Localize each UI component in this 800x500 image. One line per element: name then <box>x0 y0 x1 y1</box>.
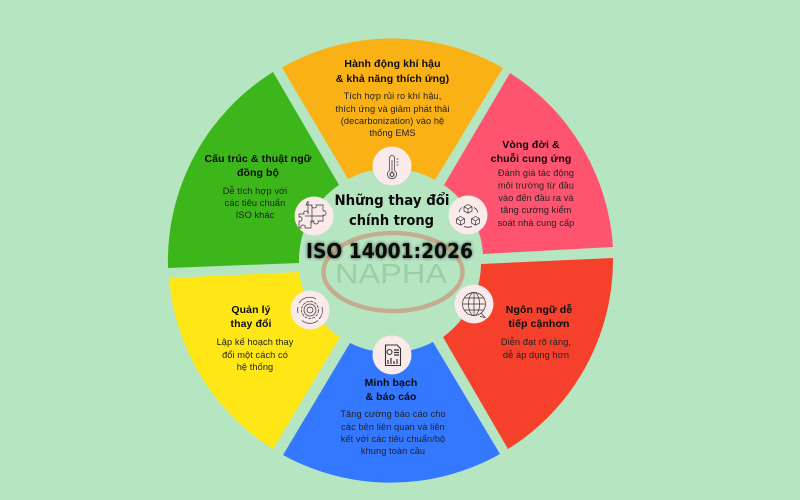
panel: accessible language <box>443 258 613 449</box>
panel: climate action <box>282 38 503 180</box>
text: life cycle: Đánh giá tác động <box>498 168 574 178</box>
text: life cycle: môi trường từ đầu <box>498 180 574 190</box>
panel: structure and terminology <box>168 72 339 268</box>
text: transparency: kết với các tiêu chuẩn/bộ <box>341 434 445 444</box>
icon: report document <box>372 336 412 374</box>
text: climate action: (decarbonization) vào hệ <box>341 116 444 126</box>
text: structure and terminology: ISO khác <box>236 210 275 220</box>
logo: faint watermark <box>324 233 462 311</box>
text: accessible language: Diễn đạt rõ ràng, <box>501 337 571 347</box>
text: change management: đổi một cách có <box>222 350 288 360</box>
text: structure and terminology: các tiêu chuẩn <box>225 198 285 208</box>
center title: Những thay đổi <box>334 192 450 209</box>
heading: accessible language: Ngôn ngữ dễ <box>506 303 572 316</box>
heading: life cycle: Vòng đời & <box>502 139 560 151</box>
heading: climate action: Hành động khí hậu <box>344 58 441 70</box>
text: accessible language: dễ áp dụng hơn <box>503 350 569 360</box>
heading: structure and terminology: Cấu trúc & thuật ngữ <box>204 153 312 165</box>
heading: transparency: & báo cáo <box>365 391 417 403</box>
logo: faint watermark: NAPHA <box>335 258 447 289</box>
text: life cycle: vào đến đầu ra và <box>498 193 574 203</box>
icon: puzzle pieces <box>294 196 334 236</box>
heading: climate action: & khả năng thích ứng) <box>336 73 449 85</box>
text: change management: hệ thống <box>237 362 273 372</box>
center title: ISO 14001:2026 <box>306 239 473 263</box>
text: life cycle: tăng cường kiểm <box>501 205 572 215</box>
heading: life cycle: chuỗi cung ứng <box>491 152 571 165</box>
icon: thermometer <box>372 146 412 186</box>
icon: cubes cycle <box>448 196 488 234</box>
text: climate action: thích ứng và giảm phát thải <box>335 104 450 114</box>
panel: change management <box>169 272 340 449</box>
text: transparency: khung toàn cầu <box>361 446 425 456</box>
icon: globe speech bubble <box>454 284 494 324</box>
panel: life cycle <box>444 73 613 254</box>
center title <box>306 192 473 263</box>
text: life cycle: soát nhà cung cấp <box>498 218 574 228</box>
icon: change flower <box>290 290 330 330</box>
text: transparency: các bên liên quan và liên <box>341 422 445 432</box>
heading: transparency: Minh bạch <box>365 377 417 389</box>
heading: structure and terminology: đồng bộ <box>237 167 279 179</box>
heading: change management: thay đổi <box>230 318 272 330</box>
text: transparency: Tăng cường báo cáo cho <box>340 409 446 419</box>
heading: accessible language: tiếp cậnhơn <box>508 318 570 330</box>
heading: change management: Quản lý <box>231 304 271 316</box>
text: structure and terminology: Dễ tích hợp với <box>223 186 287 196</box>
text: climate action: Tích hợp rủi ro khí hậu, <box>344 91 441 101</box>
text: climate action: thống EMS <box>369 128 416 138</box>
center title: chính trong <box>349 213 434 229</box>
text: change management: Lập kế hoạch thay <box>217 337 294 347</box>
center title: ISO 14001:2026 <box>306 239 473 263</box>
panel: transparency <box>283 342 500 483</box>
